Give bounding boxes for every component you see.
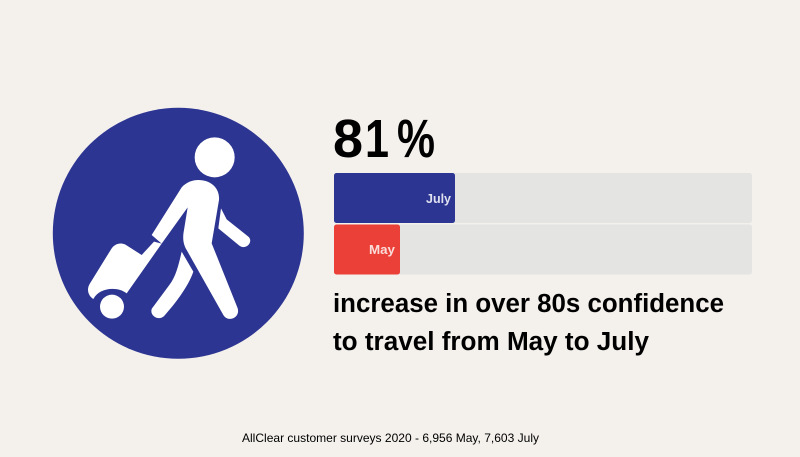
bar: May <box>334 224 752 274</box>
bar: July: July <box>426 191 452 206</box>
bar: July <box>334 173 752 223</box>
bar chart: May vs July <box>334 173 752 274</box>
headline: 81%: 1 <box>365 109 389 169</box>
caption: confidence statement: increase in over 80s confidence <box>333 290 724 318</box>
source note: AllClear customer surveys 2020 - 6,956 May, 7,603 July <box>242 431 539 445</box>
headline: 81%: % <box>397 109 435 169</box>
caption: confidence statement: to travel from May to July <box>333 328 650 356</box>
headline: 81% <box>333 109 435 169</box>
headline: 81%: 8 <box>333 109 363 169</box>
caption: confidence statement <box>333 290 724 356</box>
bar: May: May <box>369 242 396 257</box>
icon: traveller with wheeled suitcase <box>53 108 304 359</box>
